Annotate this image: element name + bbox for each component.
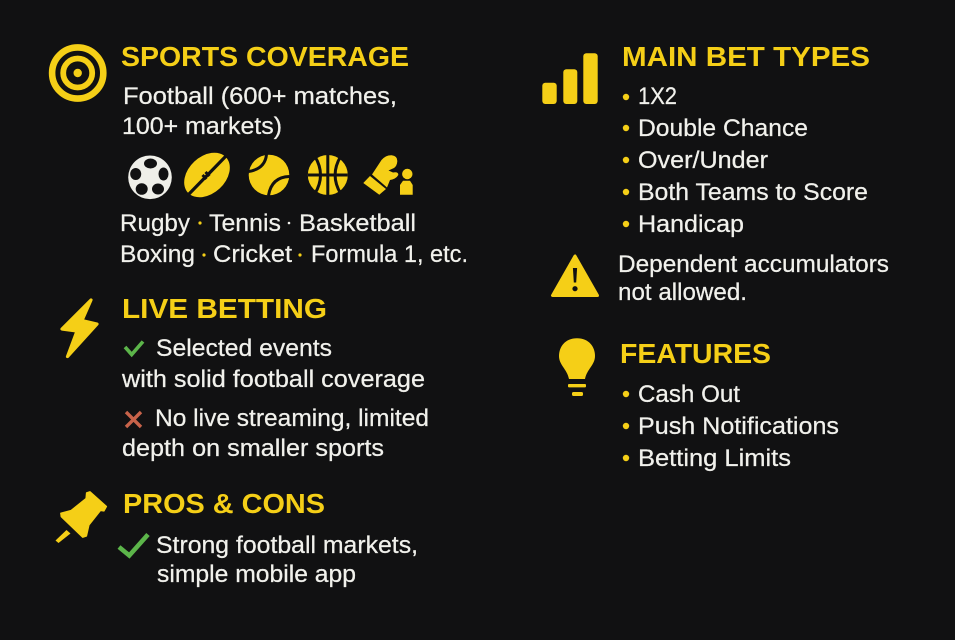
- panel: sports coverage: [52, 41, 468, 268]
- text: selected events: Selected events: [156, 335, 332, 362]
- text: dependent accumulators note: not allowed.: [618, 279, 747, 306]
- icon: target: [52, 47, 103, 99]
- heading: live betting: LIVE BETTING: [122, 293, 327, 324]
- text: selected events: [121, 335, 425, 393]
- text: football summary: 100+ markets): [122, 113, 282, 140]
- text: football summary: Football (600+ matches,: [123, 83, 397, 110]
- list: bet types: [623, 83, 868, 238]
- list: features: Push Notifications: [638, 413, 839, 440]
- text: no live streaming: [122, 405, 429, 462]
- heading: pros and cons: PROS & CONS: [123, 488, 325, 519]
- text: other sports line 2: Cricket: [213, 241, 292, 268]
- panel: pros and cons: [56, 488, 418, 588]
- icon: soccer ball: [128, 156, 172, 199]
- text: no live streaming: depth on smaller sports: [122, 435, 384, 462]
- panel: live betting: [62, 293, 429, 462]
- panel: features: [559, 338, 839, 472]
- icon: basketball: [308, 155, 348, 195]
- text: other sports line 2: Boxing: [120, 241, 195, 268]
- text: dependent accumulators note: [618, 251, 889, 306]
- list: bet types: Both Teams to Score: [638, 179, 868, 206]
- icon: red cross: [126, 412, 141, 427]
- text: other sports line 1: Basketball: [299, 210, 416, 237]
- text: pros: Strong football markets,: [156, 532, 418, 559]
- icon: push pin: [56, 492, 106, 543]
- text: other sports line 1: Tennis: [209, 210, 281, 237]
- list: features: [623, 381, 839, 472]
- list: bet types: 1X2: [638, 83, 677, 110]
- icon: tennis ball: [248, 154, 290, 196]
- icon: light bulb: [559, 338, 595, 396]
- text: no live streaming: No live streaming, limited: [155, 405, 429, 432]
- icon: bar chart: [542, 53, 598, 104]
- text: pros: simple mobile app: [157, 561, 356, 588]
- list: features: Betting Limits: [638, 445, 791, 472]
- heading: features: FEATURES: [620, 338, 771, 369]
- text: other sports line 2: Formula 1, etc.: [311, 241, 468, 268]
- heading: sports coverage: SPORTS COVERAGE: [121, 41, 409, 72]
- text: other sports line 1: Rugby: [120, 210, 191, 237]
- panel: main bet types: [542, 41, 889, 306]
- text: dependent accumulators note: Dependent accumulators: [618, 251, 889, 278]
- text: selected events: with solid football coverage: [121, 366, 425, 393]
- list: bet types: Double Chance: [638, 115, 808, 142]
- text: pros: [156, 532, 418, 588]
- text: other sports line 1: [120, 210, 416, 237]
- icon: boxing glove and figure: [363, 155, 413, 195]
- icon: lightning bolt: [62, 300, 97, 356]
- icon: warning triangle: [552, 256, 598, 296]
- list: bet types: Handicap: [638, 211, 744, 238]
- icon: green check: [125, 342, 143, 354]
- text: other sports line 2: [120, 241, 468, 268]
- text: football summary: [122, 83, 397, 140]
- list: bet types: Over/Under: [638, 147, 768, 174]
- icon: rugby ball: [175, 144, 239, 206]
- heading: main bet types: MAIN BET TYPES: [622, 41, 870, 72]
- icon: large green check: [119, 534, 148, 556]
- list: features: Cash Out: [638, 381, 740, 408]
